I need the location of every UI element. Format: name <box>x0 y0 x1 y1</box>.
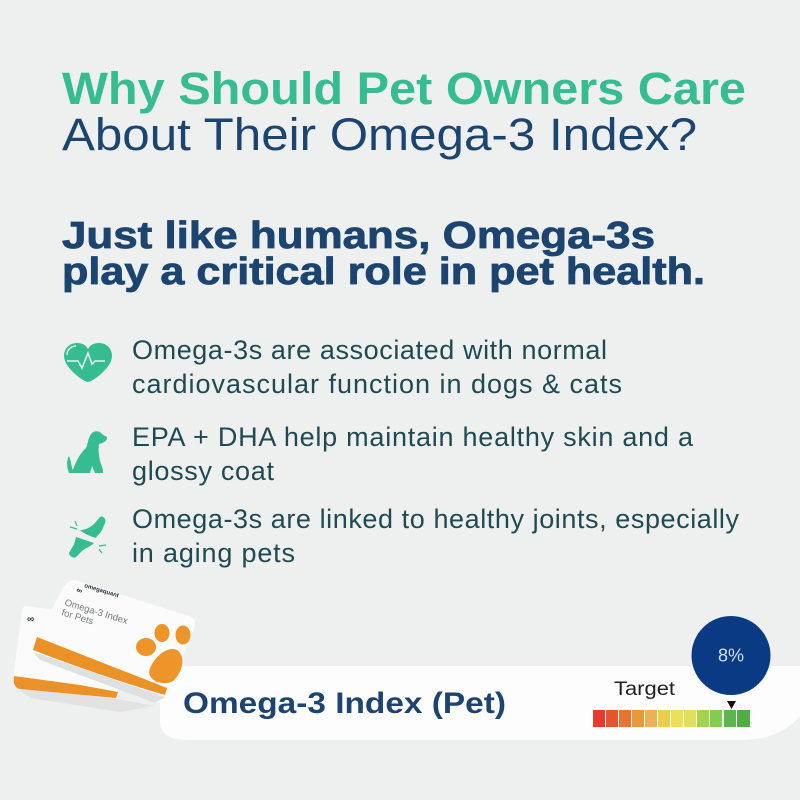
benefit text: Omega-3s are associated with normal <box>132 335 607 365</box>
icon: paw <box>136 624 190 683</box>
icon: dog <box>67 431 107 473</box>
benefit text <box>132 504 740 568</box>
benefit text: Omega-3s are linked to healthy joints, especially <box>132 504 740 534</box>
icon: heart with pulse <box>64 343 112 382</box>
title: Why Should Pet Owners Care <box>62 63 746 114</box>
benefit text: in aging pets <box>132 538 295 568</box>
value bubble: 8%: 8% <box>718 646 744 666</box>
product boxes <box>13 580 195 712</box>
subheading <box>62 215 705 293</box>
subheading: Just like humans, Omega-3s <box>62 215 655 257</box>
benefit text: cardiovascular function in dogs & cats <box>132 369 622 399</box>
benefit text <box>132 335 622 399</box>
title: About Their Omega-3 Index? <box>62 109 697 160</box>
gauge <box>593 710 750 727</box>
benefit text: glossy coat <box>132 456 274 486</box>
icon: joint <box>69 517 106 558</box>
benefit text <box>132 422 694 486</box>
benefit text: EPA + DHA help maintain healthy skin and a <box>132 422 694 452</box>
index bar panel <box>160 616 800 740</box>
back box: ∞ <box>27 614 34 625</box>
benefit: joints <box>69 504 740 568</box>
label: Omega-3 Index (Pet): Omega-3 Index (Pet) <box>183 687 506 720</box>
label: Target: Target <box>614 679 676 700</box>
value bubble: 8% <box>692 616 770 695</box>
front box: ∞ <box>75 585 84 596</box>
front box <box>33 580 195 703</box>
soft shadow <box>14 686 155 712</box>
benefit: heart health <box>64 335 622 399</box>
front box: omegaquant <box>83 583 119 599</box>
benefit: skin and coat <box>67 422 694 486</box>
title <box>62 63 746 160</box>
front box: for Pets <box>60 607 95 628</box>
marker arrow <box>727 701 736 709</box>
front box: Omega-3 Index <box>63 597 129 627</box>
subheading: play a critical role in pet health. <box>62 251 705 293</box>
back box <box>13 606 118 698</box>
